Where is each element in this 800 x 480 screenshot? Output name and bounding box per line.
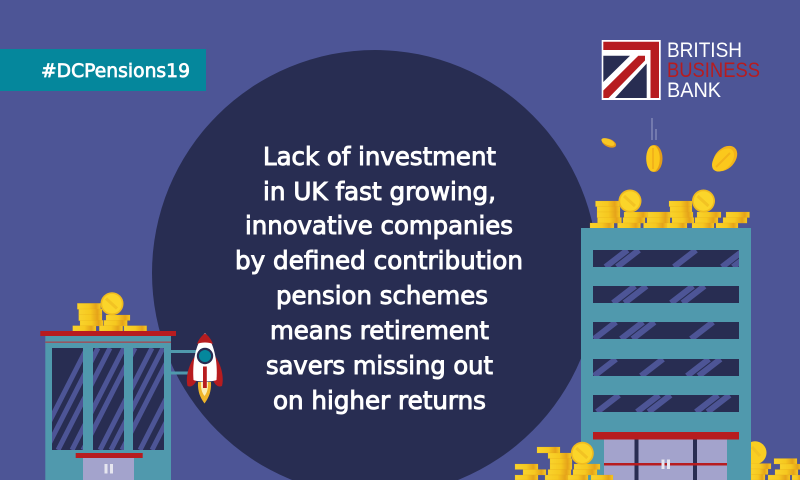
main message text: means retirement: [270, 316, 489, 345]
hashtag banner: #DCPensions19: [41, 60, 190, 82]
falling coins: [600, 118, 742, 176]
small building: [40, 331, 176, 480]
logo wordmark: [667, 39, 760, 102]
main message text: innovative companies: [245, 211, 513, 240]
logo wordmark: BUSINESS: [667, 59, 760, 82]
dark central circle: [152, 50, 598, 480]
British Business Bank logo: [602, 39, 760, 102]
main message text: [235, 142, 523, 415]
coin stacks bottom right: [751, 458, 800, 480]
coin stacks bottom left of tall building: [515, 442, 613, 480]
tall building entrance: [593, 432, 739, 480]
rocket: [187, 333, 223, 404]
main message text: by defined contribution: [235, 246, 523, 275]
main message text: on higher returns: [273, 386, 486, 415]
coin stack on small building: [73, 292, 147, 331]
tall building windows: [593, 250, 755, 412]
small building entrance: [76, 453, 143, 480]
tall building: [581, 228, 755, 480]
logo wordmark: BRITISH: [667, 39, 742, 62]
coin behind tall building, right: [744, 441, 766, 464]
main message text: Lack of investment: [263, 142, 496, 171]
logo mark: [602, 40, 661, 100]
logo wordmark: BANK: [667, 79, 721, 102]
main message text: pension schemes: [276, 281, 488, 310]
coin stacks on tall building: [590, 190, 750, 229]
small building windows: [52, 348, 164, 450]
main message text: in UK fast growing,: [263, 177, 496, 206]
rocket connector rails: [171, 352, 196, 373]
hashtag banner: [0, 49, 206, 91]
main message text: savers missing out: [266, 351, 493, 380]
